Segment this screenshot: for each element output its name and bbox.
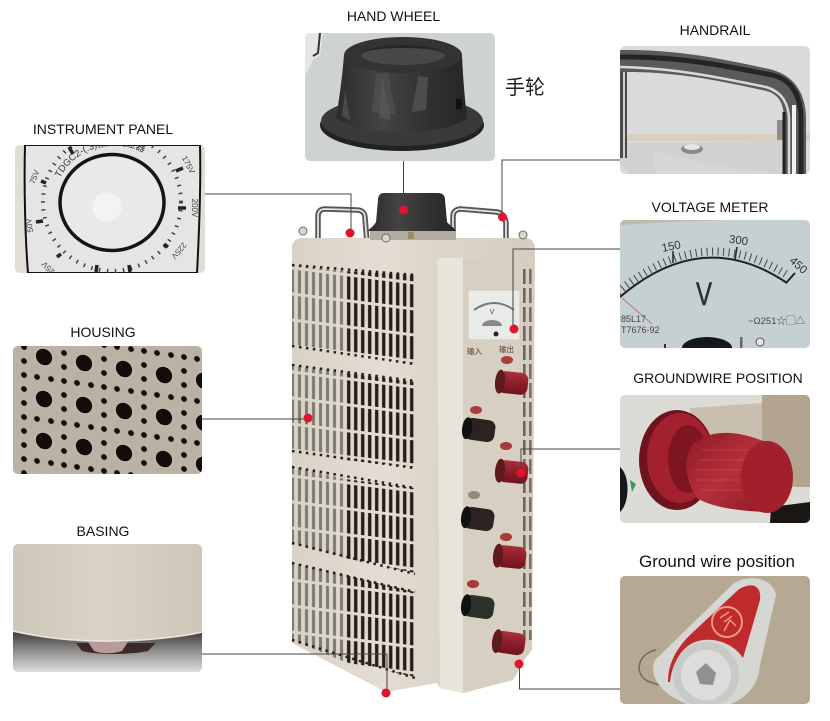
photo: perforated housing (13, 346, 202, 474)
heading: ground wire position: Ground wire position (639, 552, 795, 571)
photo: base (13, 544, 202, 672)
panel labels (467, 344, 514, 356)
photo: voltmeter: 150 (661, 239, 682, 255)
leader: ground wire position (514, 660, 620, 689)
handrail: right (453, 209, 506, 240)
photo: dial: 75V (28, 168, 42, 185)
photo: voltmeter (618, 220, 810, 350)
front panel (437, 258, 532, 693)
grille: second (292, 365, 415, 468)
leader: housing (202, 414, 312, 422)
panel: ground wire position (620, 552, 810, 708)
panel labels: 输出 (499, 344, 514, 354)
bolts (299, 227, 527, 242)
heading: housing: HOUSING (70, 324, 136, 340)
heading: instrument panel: INSTRUMENT PANEL (33, 121, 173, 137)
leader: basing (202, 654, 390, 698)
photo: hand wheel (305, 33, 495, 161)
voltmeter on panel: V (490, 309, 495, 316)
handrail: left (318, 209, 367, 242)
photo: ground tag (620, 576, 810, 708)
grille: lower (292, 563, 415, 678)
panel labels: 输入 (467, 346, 482, 356)
panel: groundwire position (620, 370, 810, 523)
red terminals (491, 369, 529, 657)
grille: upper (292, 265, 415, 364)
leader: voltage meter (510, 249, 620, 334)
photo: voltmeter: ~Ω251☆▢△ (748, 316, 806, 327)
photo: voltmeter: T7676-92 (621, 325, 660, 335)
photo: dial: 25V (40, 259, 56, 276)
red tags (467, 356, 513, 588)
photo: dial: 225V (169, 241, 188, 261)
leader: groundwire position (516, 449, 620, 478)
photo: voltmeter: V (696, 276, 712, 312)
panel: hand wheel (305, 8, 545, 161)
heading: handrail: HANDRAIL (680, 22, 751, 38)
leader: instrument panel (205, 194, 354, 238)
photo: voltmeter: 300 (728, 234, 749, 248)
photo: dial (15, 145, 205, 273)
grille: third (292, 467, 415, 574)
photo: red terminal (620, 395, 810, 523)
panel: voltage meter (618, 199, 810, 350)
main unit: voltage regulator (292, 193, 535, 693)
panel: instrument panel (15, 121, 205, 273)
photo: dial: 200V (190, 199, 199, 218)
photo: dial: TDGC2-(.3)接触调压器 (54, 145, 146, 176)
leader: hand wheel (399, 161, 408, 214)
panel: housing (13, 324, 202, 474)
voltmeter on panel (468, 290, 520, 340)
cabinet body (292, 238, 535, 693)
photo: voltmeter: 450 (787, 255, 809, 277)
heading: voltage meter: VOLTAGE METER (652, 199, 768, 215)
photo: dial: 50V (24, 217, 35, 233)
photo: voltmeter: 85L17 (621, 314, 646, 324)
photo: handrail (620, 46, 810, 174)
heading: hand wheel: HAND WHEEL (347, 8, 440, 24)
leader: handrail (498, 160, 620, 222)
photo: dial: 175V (180, 154, 197, 176)
panel: basing (13, 523, 202, 672)
heading: groundwire position: GROUNDWIRE POSITION (633, 370, 803, 386)
heading: basing: BASING (77, 523, 129, 539)
black terminals (460, 417, 496, 620)
caption: 手轮: 手轮 (505, 76, 545, 99)
panel: handrail (620, 22, 810, 174)
hand wheel on top (368, 193, 456, 240)
